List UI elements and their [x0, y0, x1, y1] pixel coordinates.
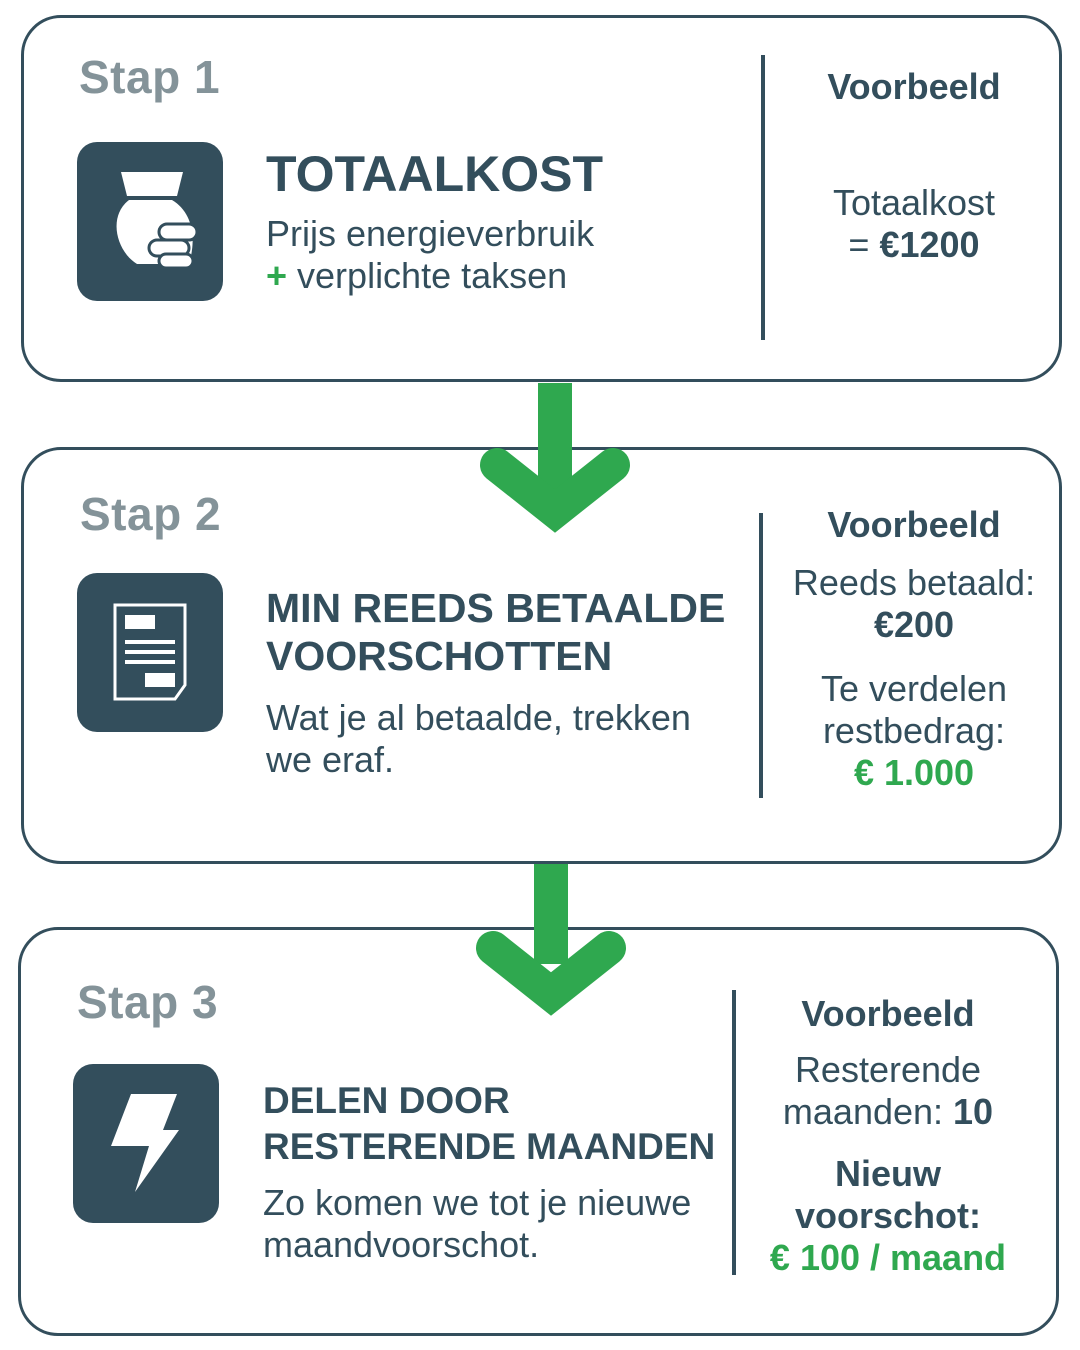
heading: delen door resterende maanden: RESTERENDE MAANDEN	[263, 1126, 715, 1167]
heading: min reeds betaalde voorschotten: VOORSCHOTTEN	[266, 633, 612, 679]
panel: step 3	[18, 927, 1059, 1336]
text: description 3: maandvoorschot.	[263, 1224, 539, 1265]
text: description 2	[266, 697, 691, 780]
heading: Stap 1: Stap 1	[79, 51, 220, 103]
example 1: Totaalkost	[833, 182, 995, 223]
example 3	[770, 993, 1006, 1278]
example 1	[827, 66, 1001, 265]
example 3: Resterende	[795, 1049, 981, 1090]
arrow 1	[480, 383, 630, 533]
heading: Stap 3: Stap 3	[77, 976, 218, 1028]
text: description 1: Prijs energieverbruik	[266, 213, 594, 254]
example 2: restbedrag:	[823, 710, 1005, 751]
panel: step 1	[21, 15, 1062, 382]
example 3: Voorbeeld	[801, 993, 975, 1034]
heading: min reeds betaalde voorschotten	[266, 585, 725, 679]
panel: step 2	[21, 447, 1062, 864]
text: description 2: we eraf.	[266, 739, 394, 780]
example 1: Voorbeeld	[827, 66, 1001, 107]
example 2: € 1.000	[854, 752, 974, 793]
example 3: Nieuw	[835, 1153, 941, 1194]
icon: money bag	[77, 142, 223, 301]
text: description 1	[266, 213, 594, 296]
example 1: = €1200	[848, 224, 980, 265]
example 3: maanden: 10	[783, 1091, 993, 1132]
text: description 2: Wat je al betaalde, trekken	[266, 697, 691, 738]
heading: min reeds betaalde voorschotten: MIN REEDS BETAALDE	[266, 585, 725, 631]
example 2: Voorbeeld	[827, 504, 1001, 545]
text: description 3	[263, 1182, 691, 1265]
arrow 2	[476, 864, 626, 1016]
example 2	[793, 504, 1035, 793]
example 2: Te verdelen	[821, 668, 1007, 709]
icon: lightning	[73, 1064, 219, 1223]
heading: delen door resterende maanden: DELEN DOOR	[263, 1080, 510, 1121]
example 2: €200	[874, 604, 954, 645]
example 3: € 100 / maand	[770, 1237, 1006, 1278]
text: description 1: + verplichte taksen	[266, 255, 567, 296]
heading: totaalkost: TOTAALKOST	[266, 146, 603, 202]
text: description 3: Zo komen we tot je nieuwe	[263, 1182, 691, 1223]
example 2: Reeds betaald:	[793, 562, 1035, 603]
icon: document	[77, 573, 223, 732]
heading: Stap 2: Stap 2	[80, 488, 221, 540]
heading: delen door resterende maanden	[263, 1080, 715, 1167]
example 3: voorschot:	[795, 1195, 981, 1236]
